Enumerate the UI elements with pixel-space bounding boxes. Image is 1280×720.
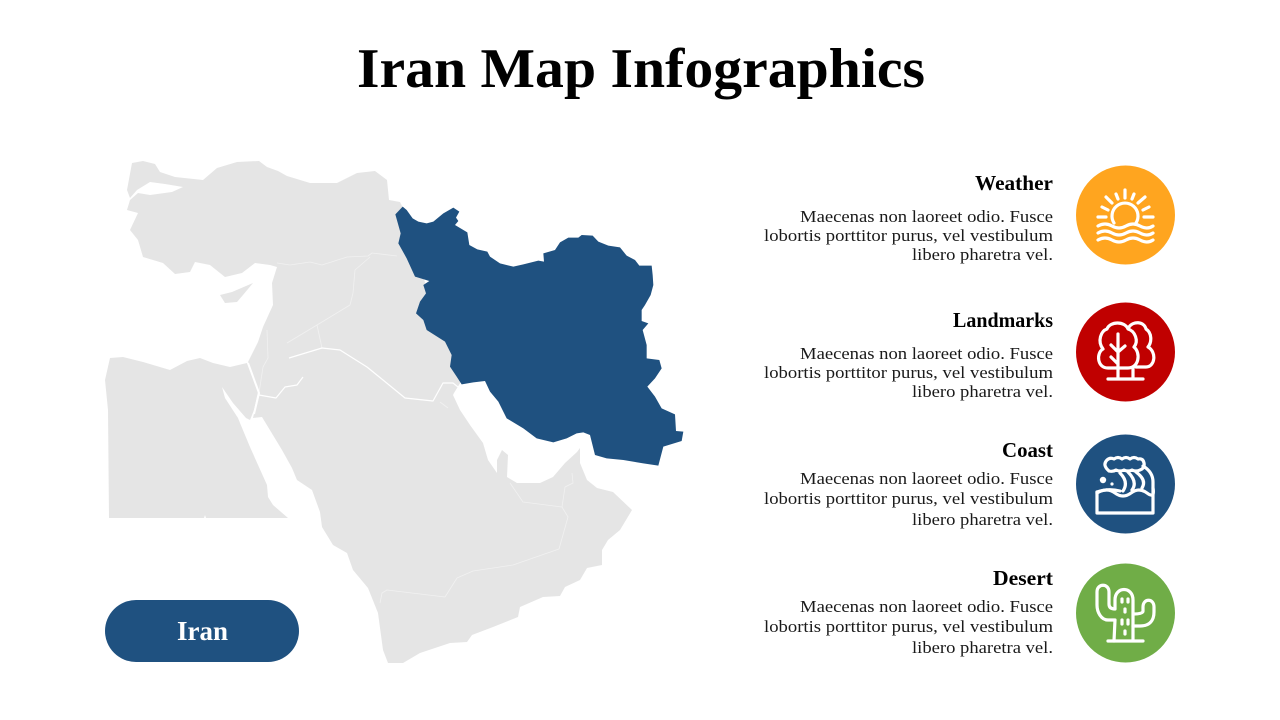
text block: Landmarks [764,344,1053,401]
pill label: Iran [105,600,299,662]
heading: Weather: Weather [975,171,1053,195]
item: Weather [764,166,1175,264]
icon detail: spray dots [1100,477,1114,486]
text block: Weather: libero pharetra vel. [912,245,1053,264]
map: Iran highlighted [395,207,683,466]
text block: Landmarks: Maecenas non laoreet odio. Fusce [800,344,1053,363]
text block: Coast: Maecenas non laoreet odio. Fusce [800,469,1053,488]
map: surrounding countries [105,161,632,663]
text block: Desert: libero pharetra vel. [912,638,1053,657]
icon: trees [1076,302,1175,402]
heading: Desert: Desert [993,566,1053,590]
map of the Middle East [105,161,683,663]
text block: Desert: lobortis porttitor purus, vel vestibulum [764,617,1053,636]
text block: Coast: lobortis porttitor purus, vel vestibulum [764,489,1053,508]
item: Coast [764,434,1175,534]
text block: Weather [764,207,1053,264]
title: Iran Map Infographics [357,38,925,100]
pill label: Iran: Iran [177,616,228,646]
item: Landmarks [764,302,1175,402]
heading: Landmarks: Landmarks [953,308,1053,332]
item: Desert [764,564,1175,662]
text block: Desert [764,597,1053,657]
text block: Weather: lobortis porttitor purus, vel vestibulum [764,226,1053,245]
text block: Weather: Maecenas non laoreet odio. Fusce [800,207,1053,226]
map: country borders [248,253,573,603]
text block: Coast [764,469,1053,529]
icon: wave [1076,434,1175,534]
text block: Coast: libero pharetra vel. [912,510,1053,529]
text block: Landmarks: libero pharetra vel. [912,382,1053,401]
heading: Coast: Coast [1002,438,1053,462]
text block: Landmarks: lobortis porttitor purus, vel vestibulum [764,363,1053,382]
icon: sun over water [1076,166,1175,264]
icon: cactus [1076,564,1175,662]
text block: Desert: Maecenas non laoreet odio. Fusce [800,597,1053,616]
